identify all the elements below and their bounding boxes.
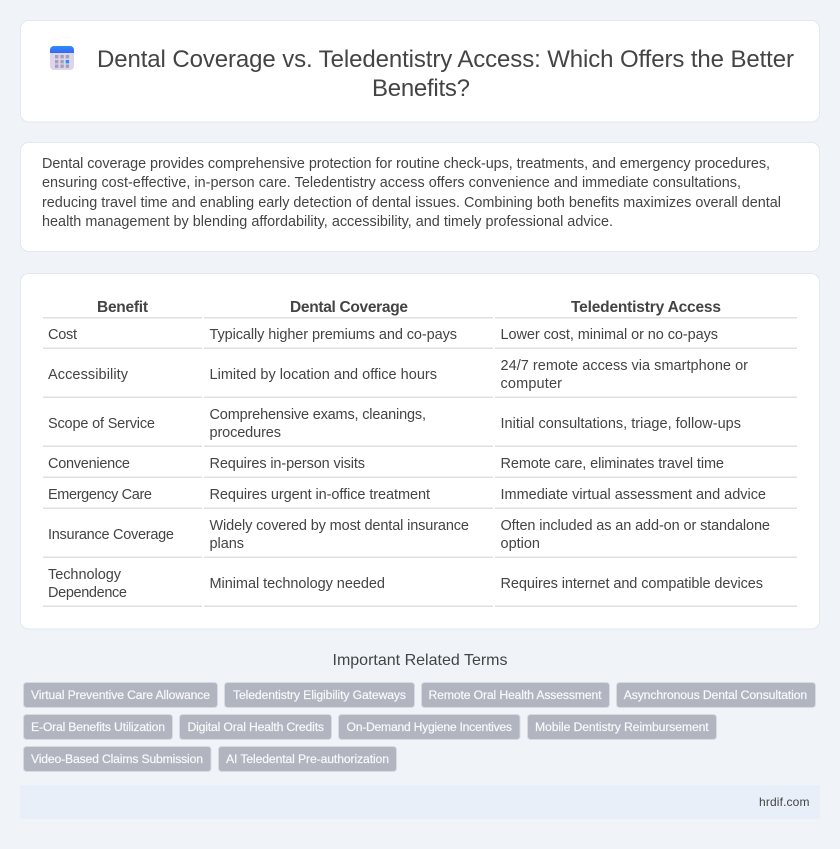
row: accessibility: 24/7 remote access via smartphone or: [500, 358, 748, 374]
row: insurance coverage: [48, 518, 770, 552]
row: scope of service: Comprehensive exams, cleanings,: [210, 407, 426, 423]
row: accessibility: Limited by location and office hours: [210, 367, 437, 383]
row: convenience: Requires in-person visits: [210, 456, 365, 472]
footer: hrdif.com: [759, 795, 810, 809]
tag: Digital Oral Health Credits: [188, 720, 324, 734]
row: technology dependence: [48, 567, 763, 601]
title: [97, 46, 794, 102]
tag: [616, 682, 816, 708]
tag: [224, 682, 414, 708]
title: Dental Coverage vs. Teledentistry Access: Which Offers the Better: [97, 46, 794, 73]
text block: summary: Dental coverage provides comprehensive protection for routine check-ups, treatments, and emergency procedures,: [42, 156, 770, 172]
table header row: [97, 299, 721, 316]
tag: Teledentistry Eligibility Gateways: [233, 688, 406, 702]
row: technology dependence: Technology: [48, 567, 122, 583]
row: cost: Typically higher premiums and co-pays: [210, 327, 457, 343]
tag: [218, 746, 396, 772]
row: insurance coverage: option: [500, 536, 540, 552]
tag: Video-Based Claims Submission: [31, 752, 203, 766]
row: scope of service: [48, 407, 741, 441]
tag: [338, 714, 520, 740]
text block: summary: reducing travel time and enabling early detection of dental issues. Combining both benefits maximizes overall dental: [42, 195, 781, 211]
text block: summary: [42, 156, 781, 230]
panel: header card: [20, 20, 820, 122]
icon: calendar: [50, 46, 74, 70]
row: emergency care: Emergency Care: [48, 487, 152, 503]
title: Benefits?: [372, 75, 470, 102]
row: technology dependence: Dependence: [48, 585, 127, 601]
row: scope of service: Initial consultations, triage, follow-ups: [500, 416, 741, 432]
table header row: Benefit: [97, 299, 148, 316]
footer: [20, 785, 820, 819]
panel: comparison table: [20, 274, 820, 629]
row: scope of service: Scope of Service: [48, 416, 155, 432]
tag: On-Demand Hygiene Incentives: [346, 720, 512, 734]
tag: [24, 714, 172, 740]
tag: AI Teledental Pre-authorization: [226, 752, 389, 766]
row: convenience: [48, 456, 724, 472]
panel: related term tags: [24, 682, 816, 772]
row: emergency care: Immediate virtual assessment and advice: [500, 487, 766, 503]
row: accessibility: Accessibility: [48, 367, 129, 383]
row: technology dependence: Requires internet and compatible devices: [500, 576, 763, 592]
tag: Virtual Preventive Care Allowance: [31, 688, 210, 702]
tag: Asynchronous Dental Consultation: [624, 688, 807, 702]
row: cost: Lower cost, minimal or no co-pays: [500, 327, 718, 343]
row: technology dependence: Minimal technology needed: [210, 576, 385, 592]
row: insurance coverage: Insurance Coverage: [48, 527, 174, 543]
row: scope of service: procedures: [210, 425, 281, 441]
tag: [422, 682, 610, 708]
row: insurance coverage: Often included as an add-on or standalone: [500, 518, 770, 534]
row: cost: Cost: [48, 327, 77, 343]
tag: Mobile Dentistry Reimbursement: [535, 720, 709, 734]
row: accessibility: computer: [500, 376, 562, 392]
row: emergency care: Requires urgent in-office treatment: [210, 487, 430, 503]
row: convenience: Convenience: [48, 456, 130, 472]
panel: description: [20, 142, 820, 252]
tag: [528, 714, 716, 740]
tag: Remote Oral Health Assessment: [428, 688, 602, 702]
row: insurance coverage: Widely covered by most dental insurance: [210, 518, 469, 534]
tag: E-Oral Benefits Utilization: [31, 720, 165, 734]
row: cost: [48, 327, 718, 343]
row: convenience: Remote care, eliminates travel time: [500, 456, 724, 472]
text block: summary: ensuring cost-effective, in-person care. Teledentistry access offers convenience and immediate consultations,: [42, 175, 741, 191]
tag: [180, 714, 332, 740]
table header row: Dental Coverage: [290, 299, 408, 316]
heading: important related terms: Important Related Terms: [332, 652, 508, 669]
row: emergency care: [48, 487, 766, 503]
tag: [24, 682, 218, 708]
table header row: Teledentistry Access: [571, 299, 721, 316]
row: insurance coverage: plans: [210, 536, 244, 552]
row: accessibility: [48, 358, 748, 392]
tag: [24, 746, 211, 772]
text block: summary: health management by blending affordability, accessibility, and timely professional advice.: [42, 214, 613, 230]
